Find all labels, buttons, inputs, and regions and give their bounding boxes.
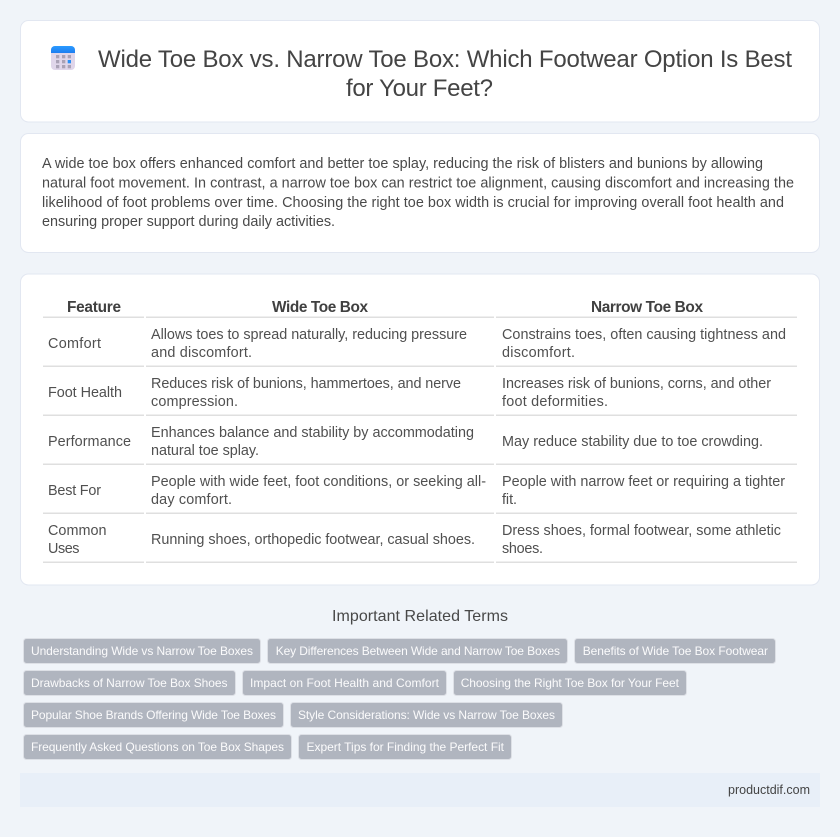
table row: comfort: Allows toes to spread naturally, reducing pressure: [151, 327, 467, 343]
table row: performance: [43, 425, 797, 465]
chip: Style Considerations: Wide vs Narrow Toe Boxes: [298, 708, 555, 722]
chip: [24, 638, 260, 664]
table header row: Feature: [67, 299, 121, 316]
table header row: [43, 299, 797, 318]
table row: foot health: Foot Health: [48, 385, 122, 401]
table row: common uses: [43, 523, 797, 563]
table row: performance: natural toe splay.: [151, 443, 259, 459]
table row: best for: People with narrow feet or requiring a tighter: [502, 474, 785, 490]
table row: comfort: discomfort.: [502, 345, 575, 361]
footer: [20, 773, 820, 807]
table row: performance: Performance: [48, 434, 131, 450]
chip: Impact on Foot Health and Comfort: [250, 676, 440, 690]
chip: Popular Shoe Brands Offering Wide Toe Boxes: [31, 708, 276, 722]
text block: introduction: natural foot movement. In contrast, a narrow toe box can restrict toe alignment, causing discomfort and increasing the: [42, 176, 794, 192]
icon: calendar: [51, 46, 75, 70]
table row: comfort: [43, 327, 797, 367]
table row: best for: Best For: [48, 483, 101, 499]
chip: Key Differences Between Wide and Narrow Toe Boxes: [276, 644, 560, 658]
title: [98, 46, 792, 102]
chip: Drawbacks of Narrow Toe Box Shoes: [31, 676, 228, 690]
table row: foot health: compression.: [151, 394, 238, 410]
title: for Your Feet?: [346, 75, 493, 102]
table row: foot health: Reduces risk of bunions, hammertoes, and nerve: [151, 376, 461, 392]
table row: foot health: [43, 376, 797, 416]
table header row: Narrow Toe Box: [591, 299, 703, 316]
chip: [298, 734, 512, 760]
table row: performance: Enhances balance and stability by accommodating: [151, 425, 474, 441]
table row: best for: People with wide feet, foot conditions, or seeking all-: [151, 474, 486, 490]
chip: [268, 638, 568, 664]
text block: introduction: likelihood of foot problems over time. Choosing the right toe box width is crucial for improving overall foot health and: [42, 195, 784, 211]
table row: comfort: Comfort: [48, 336, 101, 352]
text block: introduction: [42, 156, 794, 230]
text block: introduction: ensuring proper support during daily activities.: [42, 214, 335, 230]
chip: Understanding Wide vs Narrow Toe Boxes: [31, 644, 253, 658]
text block: introduction: A wide toe box offers enhanced comfort and better toe splay, reducing the risk of blisters and bunions by allowing: [42, 156, 763, 172]
table row: common uses: Uses: [48, 541, 80, 557]
table row: common uses: shoes.: [502, 541, 543, 557]
table row: best for: [43, 474, 797, 514]
table row: best for: fit.: [502, 492, 517, 508]
chip: [290, 702, 562, 728]
chip: [24, 734, 292, 760]
panel: header: [20, 20, 820, 122]
chip: [242, 670, 446, 696]
chip: [24, 670, 236, 696]
table header row: Wide Toe Box: [272, 299, 368, 316]
footer: productdif.com: [728, 783, 810, 797]
table row: common uses: Dress shoes, formal footwear, some athletic: [502, 523, 781, 539]
table row: foot health: foot deformities.: [502, 394, 608, 410]
table row: foot health: Increases risk of bunions, corns, and other: [502, 376, 771, 392]
related term chips: [24, 638, 776, 760]
table row: best for: day comfort.: [151, 492, 232, 508]
title: Wide Toe Box vs. Narrow Toe Box: Which Footwear Option Is Best: [98, 46, 792, 73]
heading: important related terms: Important Related Terms: [332, 608, 508, 625]
table row: performance: May reduce stability due to toe crowding.: [502, 434, 763, 450]
panel: comparison table: [20, 274, 820, 585]
chip: [24, 702, 284, 728]
table row: common uses: Running shoes, orthopedic footwear, casual shoes.: [151, 532, 475, 548]
chip: Benefits of Wide Toe Box Footwear: [583, 644, 768, 658]
chip: Expert Tips for Finding the Perfect Fit: [306, 740, 505, 754]
table row: comfort: and discomfort.: [151, 345, 252, 361]
chip: [454, 670, 686, 696]
panel: introduction text: [20, 134, 820, 252]
chip: [574, 638, 776, 664]
chip: Frequently Asked Questions on Toe Box Shapes: [31, 740, 284, 754]
table row: comfort: Constrains toes, often causing tightness and: [502, 327, 786, 343]
table row: common uses: Common: [48, 523, 106, 539]
chip: Choosing the Right Toe Box for Your Feet: [461, 676, 680, 690]
